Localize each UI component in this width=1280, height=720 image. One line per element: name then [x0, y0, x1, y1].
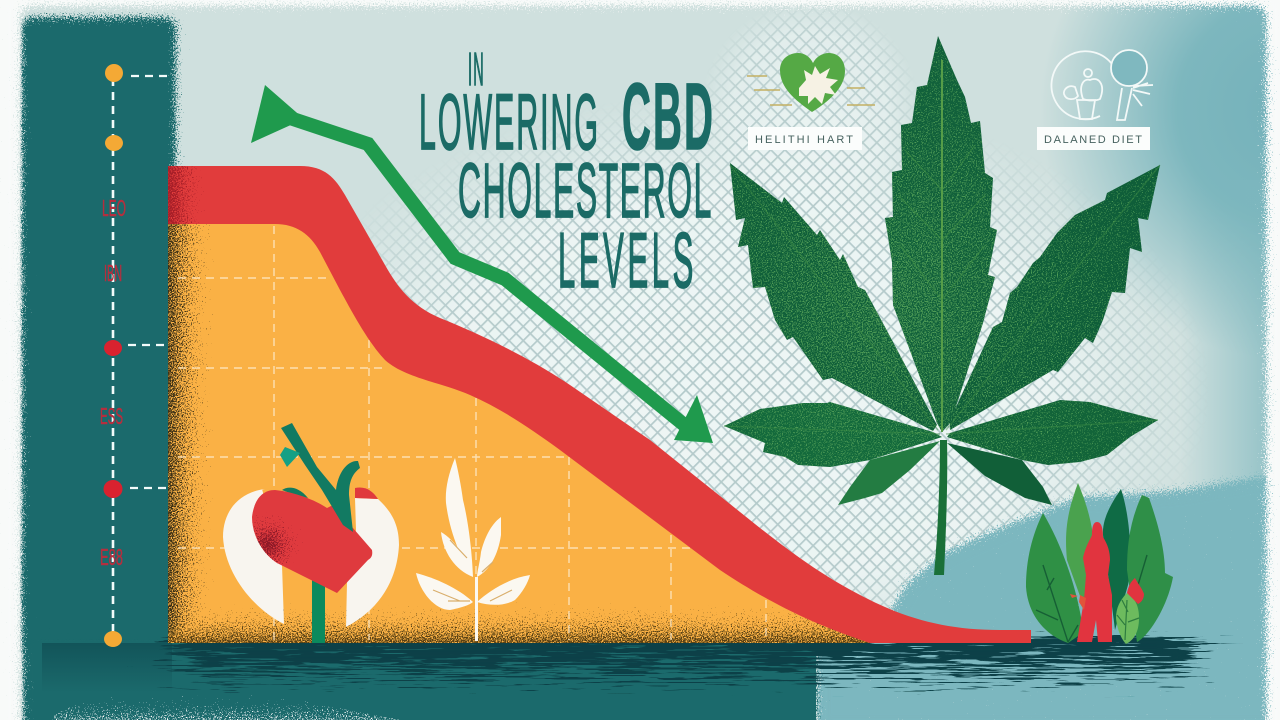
axis labels: IBN: [104, 260, 122, 286]
apple small leaf: [282, 488, 308, 498]
chart: red cholesterol curve: [168, 166, 1031, 643]
axis dots: [104, 64, 123, 647]
chart: orange area under curve: [168, 200, 880, 643]
stalk tab: [280, 447, 300, 467]
axis labels: LEO: [102, 195, 126, 221]
label: healthy heart: [748, 127, 862, 150]
bush right leaf: [1127, 495, 1173, 642]
bush leaf veins: [1036, 555, 1147, 642]
apple white halves: [223, 489, 284, 624]
small red top: [1127, 578, 1144, 604]
chart grid: [178, 226, 766, 640]
label: healthy heart: HELITHI HART: [755, 134, 853, 146]
leaf texture: [720, 30, 1165, 470]
icon: cannabis leaf: [720, 30, 1165, 575]
title: LOWERING: [419, 77, 600, 166]
text: CBD: [622, 64, 715, 170]
leaf bottom right small leaflet: [947, 443, 1052, 505]
leaf lower right leaflet: [947, 400, 1158, 465]
panel: dark teal column: [20, 17, 176, 660]
leaf bottom left small leaflet: [838, 441, 940, 505]
figure: [1077, 522, 1112, 642]
leaf upper right leaflet: [950, 165, 1160, 430]
leaf upper left leaflet: [730, 163, 937, 431]
icon: balanced diet: [1051, 50, 1153, 120]
leaf lower left leaflet: [724, 402, 942, 467]
title: IN: [468, 43, 485, 95]
leaf top leaflet: [885, 36, 997, 432]
apple red top: [355, 487, 378, 499]
arrow: green downward trend: [251, 85, 713, 443]
apple stalk: [281, 423, 360, 532]
icon: bushes with figure: [1026, 483, 1173, 644]
axis labels: ESS: [100, 403, 123, 429]
axis labels: [100, 195, 126, 570]
leaf stem: [934, 440, 947, 575]
chart: y axis: [100, 64, 170, 647]
halftone pattern: [380, 16, 1158, 612]
leaf veins: [724, 165, 1160, 434]
icon: apple with stem: [223, 423, 399, 643]
text: LEVELS: [558, 216, 697, 304]
axis labels: E88: [100, 544, 123, 570]
label: balanced diet: [1037, 127, 1150, 150]
icon: healthy heart: [747, 53, 875, 112]
title: [419, 43, 715, 304]
text: CHOLESTEROL: [458, 148, 713, 234]
small light leaf: [1116, 593, 1139, 644]
bush dark leaf: [1103, 489, 1130, 630]
icon: white plant: [416, 458, 530, 641]
apple lower stem: [312, 575, 325, 643]
label: balanced diet: DALANED DIET: [1044, 134, 1142, 146]
apple red body: [252, 490, 372, 593]
bush left leaf: [1026, 513, 1084, 643]
bush leaf far: [1066, 483, 1095, 610]
panel: lower right teal: [816, 470, 1280, 720]
panel: bottom band: [22, 636, 1200, 720]
